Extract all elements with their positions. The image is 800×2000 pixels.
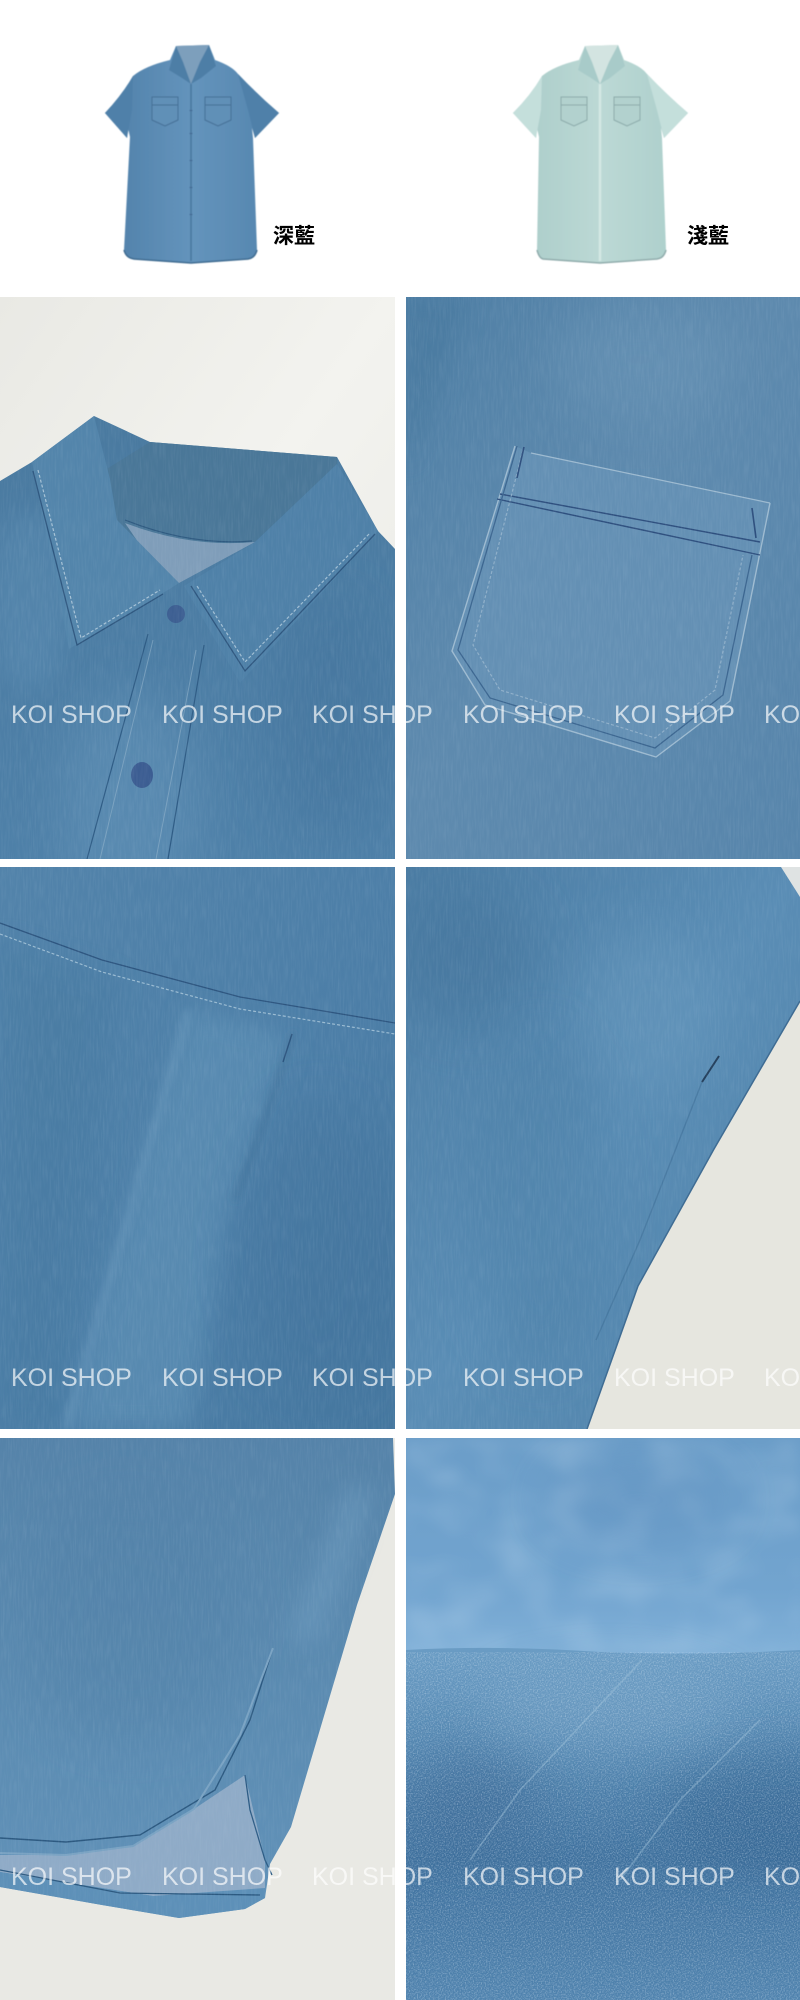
panel: side slit detail	[400, 867, 800, 1429]
watermark row 1: KOI SHOP	[312, 701, 433, 729]
watermark row 1: KOI SHOP	[463, 701, 584, 729]
placket	[87, 634, 204, 859]
slit and seam	[702, 1056, 719, 1082]
lower hem band	[0, 1872, 265, 1918]
watermark row 1: KOI SHOP	[11, 701, 132, 729]
color label: light blue: 淺藍	[687, 225, 729, 248]
watermark row 2: KOI SHOP	[312, 1364, 433, 1392]
right collar leaf	[376, 527, 378, 531]
product photo: dark blue dress	[105, 45, 279, 263]
watermark row 1	[11, 701, 800, 729]
hem stitching	[0, 1648, 273, 1842]
left collar leaf	[32, 416, 179, 649]
watermark row 2: KOI SHOP	[614, 1364, 735, 1392]
color label: dark blue: 深藍	[273, 225, 315, 248]
pleats	[235, 1033, 293, 1200]
product photo: light blue dress	[513, 45, 688, 263]
watermark row 2: KOI SHOP	[463, 1364, 584, 1392]
watermark row 2: KOI SHOP	[162, 1364, 283, 1392]
watermark row 1: KOI SHOP	[614, 701, 735, 729]
watermark row 3: KOI SHOP	[614, 1863, 735, 1891]
background behind dress	[587, 1001, 800, 1429]
watermark row 3: KOI SHOP	[312, 1863, 433, 1891]
watermark row 2	[11, 1364, 800, 1392]
buttons	[167, 605, 185, 623]
watermark row 3	[11, 1863, 800, 1891]
panel: yoke and pleat detail	[0, 867, 400, 1429]
yoke seam stitching	[0, 923, 395, 1023]
watermark row 3: KOI SHOP	[463, 1863, 584, 1891]
panel: curved hem detail	[0, 1438, 395, 2000]
pocket body	[452, 446, 770, 757]
back panel wrong side	[0, 1775, 265, 1896]
watermark row 3: KOI SHOP	[11, 1863, 132, 1891]
panel: pocket detail	[406, 297, 800, 859]
panel: collar detail	[0, 297, 395, 910]
watermark row 1: KOI SHOP	[162, 701, 283, 729]
watermark row 3: KOI SHOP	[162, 1863, 283, 1891]
collar lining	[108, 442, 337, 543]
panel: fabric texture close-up	[400, 1438, 800, 2000]
diagonal slub lines	[470, 1660, 760, 1880]
pocket stitching	[497, 494, 760, 555]
watermark row 2: KOI SHOP	[11, 1364, 132, 1392]
